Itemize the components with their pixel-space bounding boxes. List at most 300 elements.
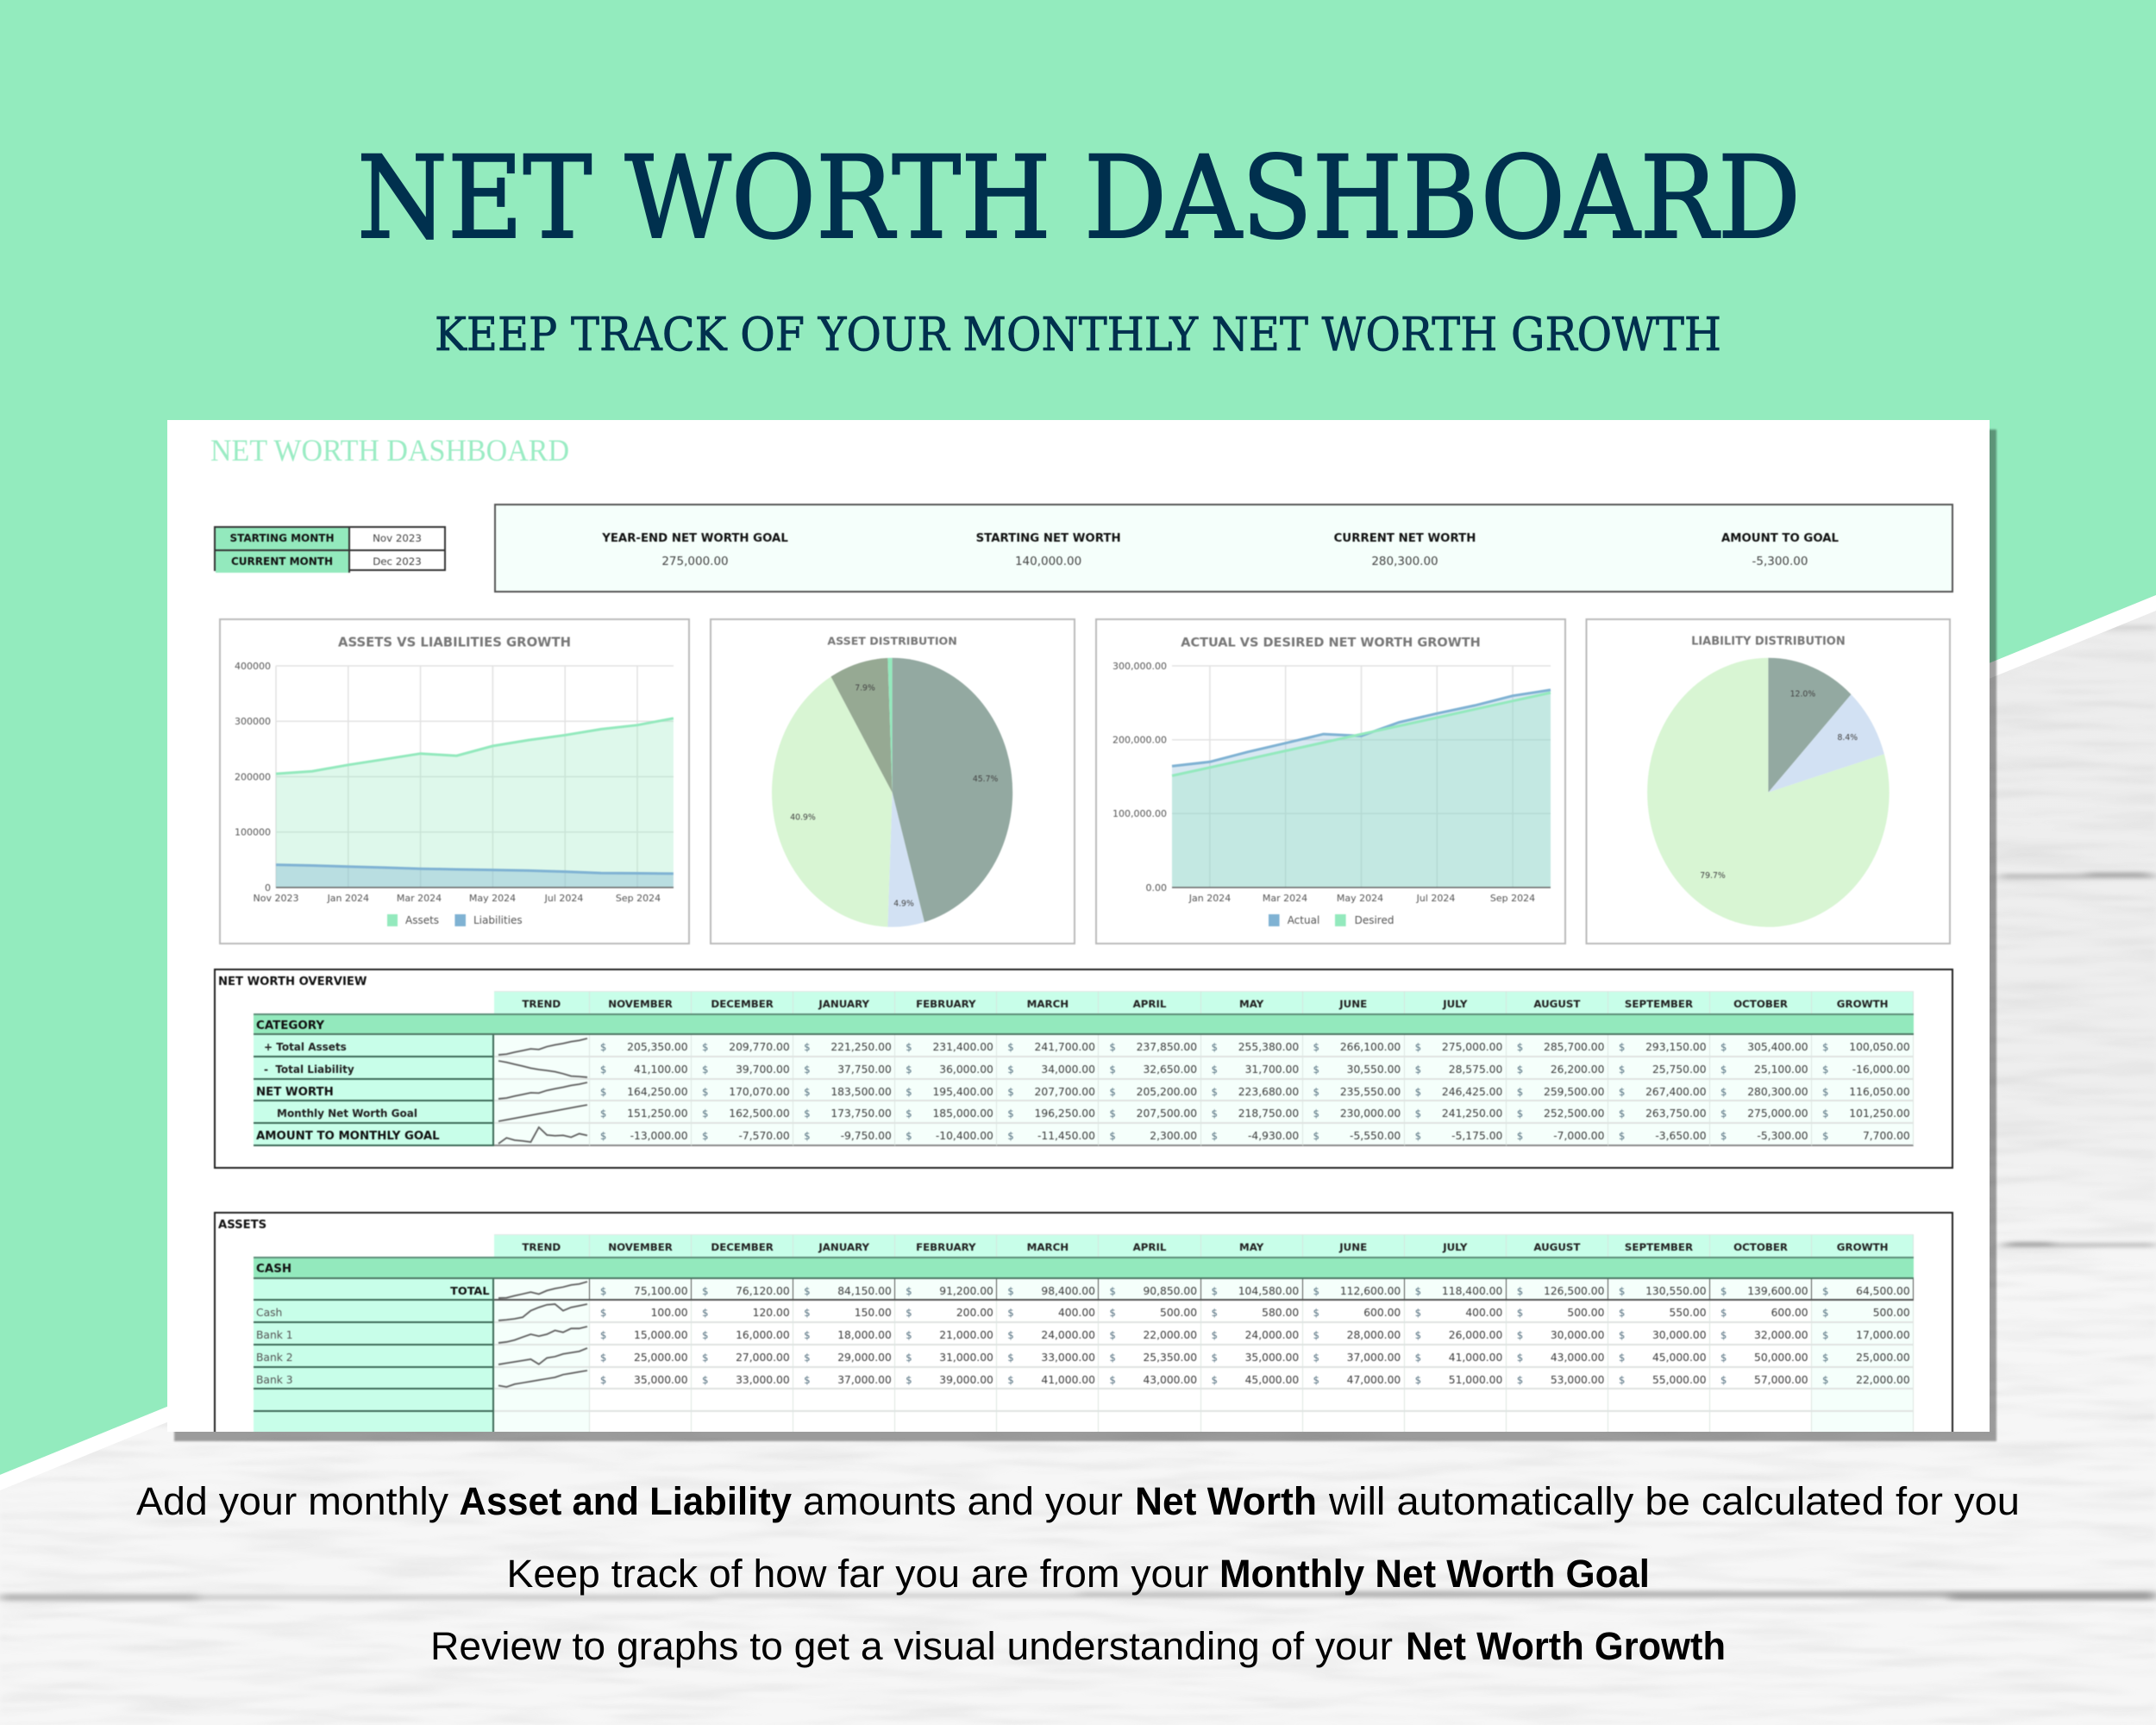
- chart: liability distribution pie: [1585, 618, 1951, 945]
- chart: assets vs liabilities growth: 300000: [235, 716, 271, 727]
- row: total liability: $: [600, 1063, 606, 1076]
- row: bank 1: 30,000.00: [1652, 1329, 1707, 1341]
- chart: actual vs desired net worth growth: 0.00: [1145, 882, 1167, 894]
- row: net worth: $: [600, 1086, 606, 1098]
- chart: assets vs liabilities growth: 400000: [235, 661, 271, 672]
- row: bank 2: 35,000.00: [1245, 1352, 1299, 1364]
- KPI: current net worth: [1333, 532, 1476, 568]
- row: total liability: $: [804, 1063, 811, 1076]
- row: total: $: [1517, 1285, 1523, 1297]
- header row: AUGUST: [1533, 1241, 1580, 1253]
- chart: actual vs desired net worth growth: 200,000.00: [1112, 735, 1167, 745]
- row: net worth: NET WORTH: [256, 1086, 334, 1099]
- row: net worth: 246,425.00: [1442, 1086, 1502, 1098]
- row: amount to monthly goal: AMOUNT TO MONTHLY GOAL: [256, 1130, 440, 1143]
- row: cash: 600.00: [1771, 1307, 1808, 1319]
- caption line 3: Net Worth Growth: [1406, 1624, 1726, 1668]
- row: monthly net worth goal: 173,750.00: [830, 1107, 892, 1120]
- row: amount to monthly goal: -4,930.00: [1248, 1130, 1299, 1142]
- row: amount to monthly goal: $: [1822, 1130, 1828, 1142]
- row: monthly net worth goal: $: [1517, 1107, 1523, 1120]
- KPI: amount to goal: [1721, 532, 1839, 568]
- row: total liability: 36,000.00: [939, 1063, 993, 1076]
- chart: liability distribution pie: 12.0%: [1790, 690, 1815, 699]
- row: bank 3: $: [804, 1374, 811, 1386]
- header row: MARCH: [1027, 998, 1069, 1010]
- row: total assets: 209,770.00: [729, 1041, 790, 1053]
- row: bank 2: $: [804, 1352, 811, 1364]
- row: total assets: 241,700.00: [1035, 1041, 1095, 1053]
- row: amount to monthly goal: -11,450.00: [1037, 1130, 1095, 1142]
- category band: [254, 1013, 1914, 1035]
- header row: JANUARY: [818, 1241, 869, 1253]
- row: bank 2: $: [702, 1352, 708, 1364]
- KPI: amount to goal: -5,300.00: [1752, 555, 1808, 568]
- row: bank 3: 39,000.00: [939, 1374, 993, 1386]
- caption line 1: amounts and your: [803, 1479, 1123, 1523]
- row: net worth: $: [1619, 1086, 1625, 1098]
- month selector table: [214, 526, 446, 571]
- row: amount to monthly goal: $: [1619, 1130, 1625, 1142]
- header row: JULY: [1443, 998, 1467, 1010]
- row: total: $: [1619, 1285, 1625, 1297]
- row: monthly net worth goal: 275,000.00: [1747, 1107, 1808, 1120]
- row: total assets: 293,150.00: [1645, 1041, 1707, 1053]
- row: total: 76,120.00: [736, 1285, 790, 1297]
- row: amount to monthly goal: $: [804, 1130, 811, 1142]
- caption line 2: Monthly Net Worth Goal: [1219, 1552, 1650, 1596]
- row: cash: $: [1517, 1307, 1523, 1319]
- row: bank 1: $: [1313, 1329, 1319, 1341]
- header row: GROWTH: [1837, 1241, 1889, 1253]
- row: cash: $: [1619, 1307, 1625, 1319]
- row: net worth: 280,300.00: [1747, 1086, 1808, 1098]
- row: monthly net worth goal: $: [1415, 1107, 1421, 1120]
- header row: SEPTEMBER: [1625, 1241, 1693, 1253]
- row: total assets: $: [1313, 1041, 1319, 1053]
- row: bank 3: 57,000.00: [1754, 1374, 1808, 1386]
- row: bank 2: $: [1313, 1352, 1319, 1364]
- row: bank 1: 26,000.00: [1449, 1329, 1502, 1341]
- cash band: [254, 1257, 1914, 1279]
- row: bank 3: 55,000.00: [1652, 1374, 1707, 1386]
- table: assets cash: [253, 1233, 1915, 1432]
- row: amount to monthly goal: $: [1212, 1130, 1218, 1142]
- row: cash: 550.00: [1670, 1307, 1707, 1319]
- row: total liability: $: [1619, 1063, 1625, 1076]
- row: cash: 500.00: [1160, 1307, 1197, 1319]
- row: bank 1: 17,000.00: [1856, 1329, 1910, 1341]
- row: total assets: $: [1517, 1041, 1523, 1053]
- row: bank 3: 37,000.00: [837, 1374, 892, 1386]
- header row: MAY: [1239, 998, 1263, 1010]
- row: amount to monthly goal: $: [1007, 1130, 1014, 1142]
- header row: OCTOBER: [1733, 1241, 1788, 1253]
- header row: AUGUST: [1533, 998, 1580, 1010]
- row: amount to monthly goal: [253, 1123, 1915, 1147]
- row: amount to monthly goal: -5,300.00: [1757, 1130, 1808, 1142]
- panel shadow: [174, 430, 1996, 1441]
- row: total liability: 25,750.00: [1652, 1063, 1707, 1076]
- row: monthly net worth goal: [253, 1101, 1915, 1125]
- row: amount to monthly goal: -7,000.00: [1553, 1130, 1604, 1142]
- row: total: $: [1822, 1285, 1828, 1297]
- row: monthly net worth goal: 196,250.00: [1035, 1107, 1095, 1120]
- row: net worth: 164,250.00: [627, 1086, 688, 1098]
- row: total: 75,100.00: [634, 1285, 688, 1297]
- row: cash: $: [804, 1307, 811, 1319]
- row: total: $: [1109, 1285, 1116, 1297]
- KPI: year-end goal: YEAR-END NET WORTH GOAL: [602, 532, 788, 545]
- caption line 1: Net Worth: [1135, 1479, 1317, 1523]
- row: bank 1: 28,000.00: [1347, 1329, 1401, 1341]
- row: total assets: 275,000.00: [1442, 1041, 1502, 1053]
- row: net worth: $: [1517, 1086, 1523, 1098]
- row: bank 3: $: [1720, 1374, 1727, 1386]
- row: bank 3: 35,000.00: [634, 1374, 688, 1386]
- row: bank 2: $: [1212, 1352, 1218, 1364]
- row: total liability: $: [1415, 1063, 1421, 1076]
- row: amount to monthly goal: -5,550.00: [1350, 1130, 1401, 1142]
- row: total liability: -16,000.00: [1852, 1063, 1910, 1076]
- KPI: starting net worth: 140,000.00: [1015, 555, 1081, 568]
- row: bank 2: [253, 1345, 1915, 1369]
- header row: JULY: [1443, 1241, 1467, 1253]
- row: net worth: 170,070.00: [729, 1086, 790, 1098]
- row: amount to monthly goal: -10,400.00: [936, 1130, 993, 1142]
- row: total liability: 39,700.00: [736, 1063, 790, 1076]
- row: cash: 200.00: [956, 1307, 993, 1319]
- row: total assets: 205,350.00: [627, 1041, 688, 1053]
- row: total liability: $: [1109, 1063, 1116, 1076]
- row: total: 90,850.00: [1143, 1285, 1197, 1297]
- row: bank 3: Bank 3: [256, 1374, 293, 1386]
- row: total: $: [804, 1285, 811, 1297]
- row: bank 1: 24,000.00: [1245, 1329, 1299, 1341]
- row: bank 3: 53,000.00: [1551, 1374, 1604, 1386]
- row: cash: $: [1212, 1307, 1218, 1319]
- row: monthly net worth goal: 151,250.00: [627, 1107, 688, 1120]
- category band: CATEGORY: [256, 1019, 324, 1032]
- row: bank 3: 47,000.00: [1347, 1374, 1401, 1386]
- KPI summary box: [494, 504, 1953, 593]
- row: bank 1: 21,000.00: [939, 1329, 993, 1341]
- row: bank 3: 41,000.00: [1041, 1374, 1095, 1386]
- month selector table: Dec 2023: [373, 555, 422, 568]
- row: total assets: $: [804, 1041, 811, 1053]
- row: total: $: [1415, 1285, 1421, 1297]
- row: bank 1: 24,000.00: [1041, 1329, 1095, 1341]
- row: total: 112,600.00: [1340, 1285, 1401, 1297]
- row: bank 2: $: [1415, 1352, 1421, 1364]
- row: bank 2: 37,000.00: [1347, 1352, 1401, 1364]
- row: total: $: [1313, 1285, 1319, 1297]
- row: bank 3: 43,000.00: [1143, 1374, 1197, 1386]
- row: bank 2: 41,000.00: [1449, 1352, 1502, 1364]
- row: bank 1: $: [1415, 1329, 1421, 1341]
- row: bank 3: 22,000.00: [1856, 1374, 1910, 1386]
- row: bank 3: [253, 1367, 1915, 1390]
- header row: [493, 1233, 1915, 1258]
- row: net worth: 183,500.00: [830, 1086, 892, 1098]
- caption line 1: will automatically be calculated for you: [1328, 1479, 2020, 1523]
- chart: asset distribution pie: 45.7%: [973, 775, 999, 784]
- header row: DECEMBER: [711, 998, 774, 1010]
- empty row: [253, 1389, 1915, 1413]
- row: bank 3: $: [1313, 1374, 1319, 1386]
- row: bank 3: 45,000.00: [1245, 1374, 1299, 1386]
- header row: NOVEMBER: [608, 998, 673, 1010]
- row: total assets: 237,850.00: [1137, 1041, 1197, 1053]
- row: cash: 580.00: [1262, 1307, 1299, 1319]
- row: monthly net worth goal: 230,000.00: [1340, 1107, 1401, 1120]
- caption line 1: Add your monthly: [136, 1479, 448, 1523]
- row: total: 130,550.00: [1645, 1285, 1707, 1297]
- row: amount to monthly goal: $: [1517, 1130, 1523, 1142]
- row: monthly net worth goal: $: [600, 1107, 606, 1120]
- caption: description lines: [136, 1479, 2020, 1668]
- header row: SEPTEMBER: [1625, 998, 1693, 1010]
- row: total assets: 231,400.00: [932, 1041, 993, 1053]
- row: net worth: $: [804, 1086, 811, 1098]
- row: bank 2: $: [1619, 1352, 1625, 1364]
- row: net worth: 205,200.00: [1137, 1086, 1197, 1098]
- chart: assets vs liabilities growth: Jul 2024: [544, 893, 583, 904]
- row: bank 2: 27,000.00: [736, 1352, 790, 1364]
- row: monthly net worth goal: 252,500.00: [1544, 1107, 1604, 1120]
- row: total: TOTAL: [450, 1285, 490, 1298]
- chart: actual vs desired net worth growth: Actual: [1288, 914, 1319, 926]
- row: net worth: $: [1822, 1086, 1828, 1098]
- row: bank 3: $: [1212, 1374, 1218, 1386]
- row: total assets: 100,050.00: [1849, 1041, 1910, 1053]
- row: total liability: [253, 1057, 1915, 1081]
- row: net worth: $: [702, 1086, 708, 1098]
- row: total liability: 28,575.00: [1449, 1063, 1502, 1076]
- header row: OCTOBER: [1733, 998, 1788, 1010]
- header row: FEBRUARY: [916, 998, 976, 1010]
- row: bank 1: $: [1720, 1329, 1727, 1341]
- row: bank 2: $: [906, 1352, 912, 1364]
- chart: actual vs desired net worth growth: 300,000.00: [1112, 661, 1167, 672]
- row: monthly net worth goal: $: [804, 1107, 811, 1120]
- row: net worth: $: [1720, 1086, 1727, 1098]
- row: cash: 120.00: [753, 1307, 790, 1319]
- chart: actual vs desired net worth growth: Mar 2024: [1263, 893, 1307, 904]
- row: total assets: $: [1720, 1041, 1727, 1053]
- row: bank 1: $: [702, 1329, 708, 1341]
- row: total liability: $: [1517, 1063, 1523, 1076]
- row: bank 2: 25,000.00: [1856, 1352, 1910, 1364]
- row: amount to monthly goal: $: [600, 1130, 606, 1142]
- row: amount to monthly goal: $: [1109, 1130, 1116, 1142]
- row: total assets: 305,400.00: [1747, 1041, 1808, 1053]
- row: cash: $: [1313, 1307, 1319, 1319]
- row: cash: 400.00: [1465, 1307, 1502, 1319]
- row: monthly net worth goal: $: [702, 1107, 708, 1120]
- chart: actual vs desired net worth growth: Jul 2024: [1416, 893, 1455, 904]
- row: total liability: $: [1720, 1063, 1727, 1076]
- table: net worth overview: [253, 990, 1915, 1147]
- chart: assets vs liabilities growth: Nov 2023: [254, 893, 298, 904]
- cash band: CASH: [256, 1263, 291, 1276]
- row: monthly net worth goal: 263,750.00: [1645, 1107, 1707, 1120]
- chart: actual vs desired net worth growth: Sep 2024: [1490, 893, 1535, 904]
- row: bank 3: 51,000.00: [1449, 1374, 1502, 1386]
- chart: assets vs liabilities growth: Jan 2024: [327, 893, 369, 904]
- row: net worth: 195,400.00: [932, 1086, 993, 1098]
- row: total liability: $: [1313, 1063, 1319, 1076]
- row: cash: $: [1415, 1307, 1421, 1319]
- row: total liability: 30,550.00: [1347, 1063, 1401, 1076]
- row: bank 1: 32,000.00: [1754, 1329, 1808, 1341]
- KPI: amount to goal: AMOUNT TO GOAL: [1721, 532, 1839, 545]
- row: net worth: 223,680.00: [1238, 1086, 1299, 1098]
- row: amount to monthly goal: -5,175.00: [1451, 1130, 1502, 1142]
- row: total assets: 221,250.00: [830, 1041, 892, 1053]
- row: total: $: [906, 1285, 912, 1297]
- row: monthly net worth goal: $: [1313, 1107, 1319, 1120]
- row: bank 1: $: [906, 1329, 912, 1341]
- chart: assets vs liabilities growth: Mar 2024: [397, 893, 442, 904]
- header row: MARCH: [1027, 1241, 1069, 1253]
- row: total: [253, 1278, 1915, 1302]
- header row: NOVEMBER: [608, 1241, 673, 1253]
- row: bank 1: Bank 1: [256, 1329, 293, 1341]
- row: net worth: 267,400.00: [1645, 1086, 1707, 1098]
- row: cash: 500.00: [1567, 1307, 1604, 1319]
- row: total: $: [702, 1285, 708, 1297]
- header row: APRIL: [1133, 998, 1166, 1010]
- row: bank 1: 22,000.00: [1143, 1329, 1197, 1341]
- KPI: year-end goal: [602, 532, 788, 568]
- row: bank 2: $: [1517, 1352, 1523, 1364]
- row: monthly net worth goal: $: [1007, 1107, 1014, 1120]
- row: cash: $: [1109, 1307, 1116, 1319]
- row: monthly net worth goal: $: [1212, 1107, 1218, 1120]
- chart: actual vs desired net worth growth: ACTUAL VS DESIRED NET WORTH GROWTH: [1181, 637, 1481, 650]
- header row: MAY: [1239, 1241, 1263, 1253]
- row: total assets: [253, 1034, 1915, 1058]
- KPI: year-end goal: 275,000.00: [661, 555, 729, 568]
- row: total: 91,200.00: [939, 1285, 993, 1297]
- row: amount to monthly goal: -9,750.00: [841, 1130, 892, 1142]
- row: total assets: 266,100.00: [1340, 1041, 1401, 1053]
- KPI: current net worth: CURRENT NET WORTH: [1334, 532, 1476, 545]
- row: amount to monthly goal: 7,700.00: [1863, 1130, 1910, 1142]
- row: monthly net worth goal: $: [1109, 1107, 1116, 1120]
- row: total assets: $: [906, 1041, 912, 1053]
- row: total assets: $: [1212, 1041, 1218, 1053]
- month selector table: Nov 2023: [373, 532, 422, 544]
- row: cash: $: [702, 1307, 708, 1319]
- row: amount to monthly goal: -7,570.00: [738, 1130, 790, 1142]
- row: amount to monthly goal: -13,000.00: [630, 1130, 688, 1142]
- row: total assets: $: [600, 1041, 606, 1053]
- chart: actual vs desired net worth growth: [1095, 618, 1566, 945]
- row: total: 98,400.00: [1041, 1285, 1095, 1297]
- row: bank 3: $: [1822, 1374, 1828, 1386]
- row: total assets: $: [1619, 1041, 1625, 1053]
- row: bank 1: [253, 1322, 1915, 1346]
- row: bank 2: 25,350.00: [1143, 1352, 1197, 1364]
- chart: assets vs liabilities growth: [219, 618, 690, 945]
- section box: assets: [214, 1212, 1953, 1557]
- row: total assets: $: [1007, 1041, 1014, 1053]
- row: total assets: $: [702, 1041, 708, 1053]
- row: net worth: $: [1109, 1086, 1116, 1098]
- row: total liability: $: [1007, 1063, 1014, 1076]
- row: bank 2: 43,000.00: [1551, 1352, 1604, 1364]
- caption line 2: Keep track of how far you are from your: [507, 1552, 1209, 1596]
- month selector table: CURRENT MONTH: [231, 555, 333, 568]
- row: amount to monthly goal: $: [906, 1130, 912, 1142]
- row: bank 2: $: [1720, 1352, 1727, 1364]
- row: amount to monthly goal: $: [1313, 1130, 1319, 1142]
- chart: liability distribution pie: LIABILITY DISTRIBUTION: [1691, 635, 1846, 649]
- row: bank 3: $: [906, 1374, 912, 1386]
- caption line 1: [136, 1479, 2020, 1523]
- row: total liability: $: [1212, 1063, 1218, 1076]
- row: monthly net worth goal: Monthly Net Worth Goal: [277, 1107, 417, 1120]
- header row: APRIL: [1133, 1241, 1166, 1253]
- row: bank 1: $: [1517, 1329, 1523, 1341]
- row: bank 1: $: [1822, 1329, 1828, 1341]
- row: bank 2: $: [1822, 1352, 1828, 1364]
- chart: asset distribution pie: 4.9%: [893, 899, 914, 909]
- row: total: 126,500.00: [1544, 1285, 1604, 1297]
- header row: JUNE: [1339, 1241, 1367, 1253]
- row: total: $: [1212, 1285, 1218, 1297]
- chart: actual vs desired net worth growth: Jan 2024: [1188, 893, 1231, 904]
- chart: liability distribution pie: 79.7%: [1700, 871, 1726, 881]
- row: bank 1: $: [600, 1329, 606, 1341]
- row: cash: $: [1822, 1307, 1828, 1319]
- section box: net worth overview: [214, 969, 1953, 1169]
- row: bank 3: $: [1007, 1374, 1014, 1386]
- row: total: 118,400.00: [1442, 1285, 1502, 1297]
- chart: actual vs desired net worth growth: May 2024: [1337, 893, 1383, 904]
- header row: JANUARY: [818, 998, 869, 1010]
- row: total liability: - Total Liability: [264, 1063, 354, 1076]
- row: total liability: 37,750.00: [837, 1063, 892, 1076]
- row: total assets: $: [1109, 1041, 1116, 1053]
- row: amount to monthly goal: $: [1720, 1130, 1727, 1142]
- row: total assets: $: [1415, 1041, 1421, 1053]
- row: bank 1: 16,000.00: [736, 1329, 790, 1341]
- chart: assets vs liabilities growth: ASSETS VS LIABILITIES GROWTH: [338, 635, 571, 650]
- row: monthly net worth goal: 218,750.00: [1238, 1107, 1299, 1120]
- row: total liability: 26,200.00: [1551, 1063, 1604, 1076]
- row: total: 64,500.00: [1856, 1285, 1910, 1297]
- row: total assets: + Total Assets: [264, 1041, 347, 1053]
- header row: [493, 990, 1915, 1014]
- row: bank 2: $: [1007, 1352, 1014, 1364]
- section heading: NET WORTH OVERVIEW: [218, 975, 367, 988]
- row: amount to monthly goal: 2,300.00: [1150, 1130, 1197, 1142]
- row: bank 2: 33,000.00: [1041, 1352, 1095, 1364]
- row: monthly net worth goal: $: [906, 1107, 912, 1120]
- chart: asset distribution pie: ASSET DISTRIBUTION: [827, 635, 957, 647]
- row: total liability: $: [906, 1063, 912, 1076]
- row: monthly net worth goal: $: [1720, 1107, 1727, 1120]
- row: bank 2: 29,000.00: [837, 1352, 892, 1364]
- caption line 2: [507, 1552, 1650, 1596]
- row: total liability: 31,700.00: [1245, 1063, 1299, 1076]
- row: cash: $: [1007, 1307, 1014, 1319]
- header row: GROWTH: [1837, 998, 1889, 1010]
- row: monthly net worth goal: 207,500.00: [1137, 1107, 1197, 1120]
